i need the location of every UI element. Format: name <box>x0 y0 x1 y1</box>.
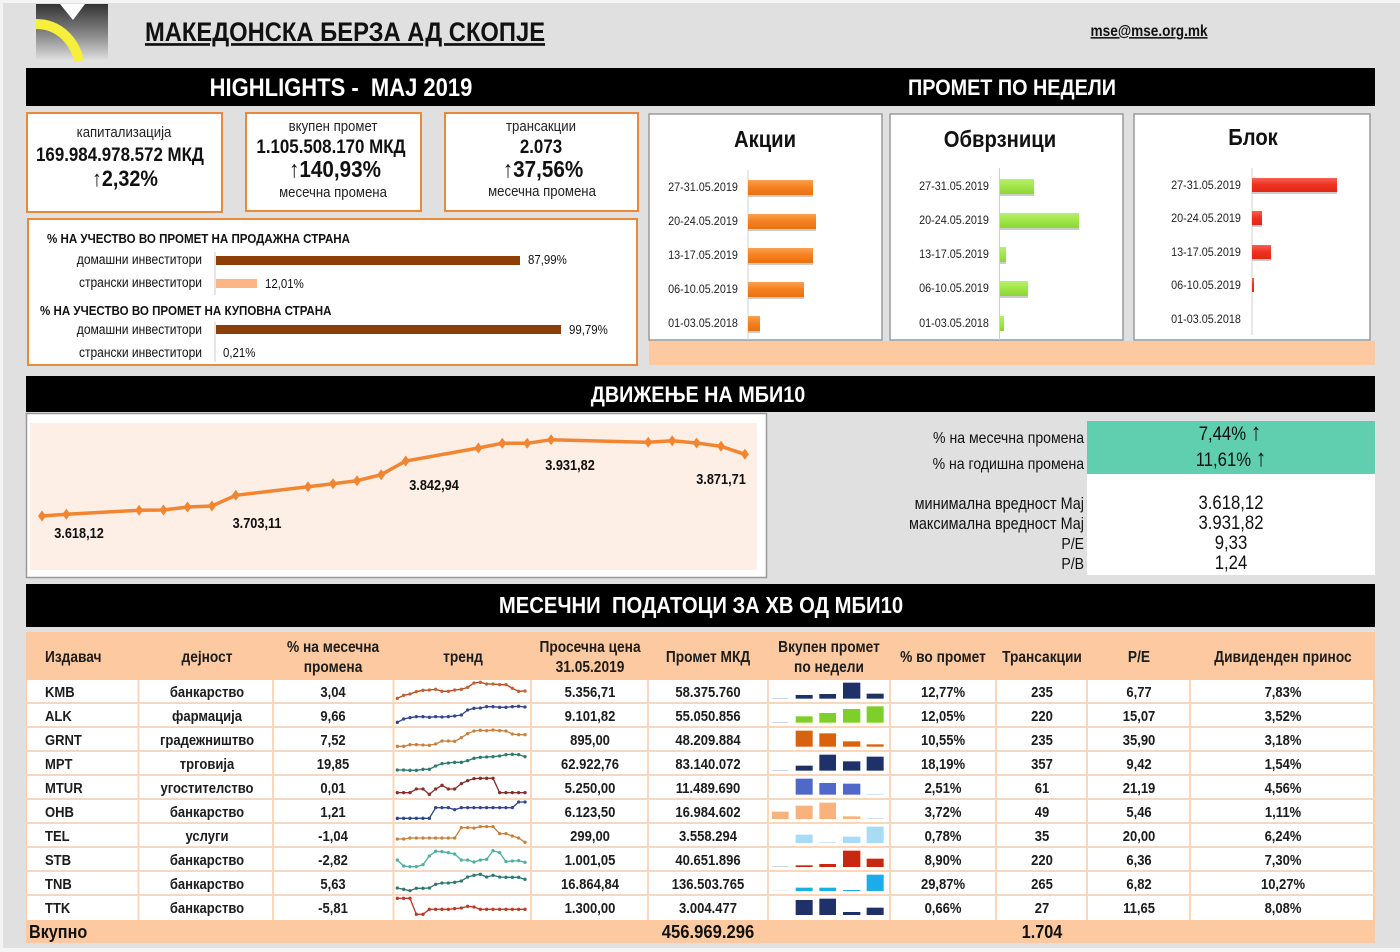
row ALK: фармација <box>172 707 242 724</box>
panel: MBI10 statistics: P/E <box>1061 535 1084 553</box>
row TTK: -5,81 <box>318 899 348 916</box>
row TNB: 6,82 <box>1126 875 1152 892</box>
row TNB: 136.503.765 <box>672 875 744 892</box>
row TNB: TNB <box>45 875 72 892</box>
chart: block trades: 01-03.05.2018 <box>1171 313 1241 326</box>
line chart: MBI10: 3.703,11 <box>233 515 282 531</box>
panel: MBI10 statistics: 11,61% ↑ <box>1196 445 1266 471</box>
row STB: банкарство <box>170 851 244 868</box>
line chart: MBI10 <box>26 414 766 578</box>
chart: shares: 06-10.05.2019 <box>668 283 738 296</box>
row OHB: 1,21 <box>320 803 346 820</box>
row OHB: 3,72% <box>925 803 962 820</box>
row MTUR: 61 <box>1035 779 1049 796</box>
row TEL: 20,00 <box>1123 827 1156 844</box>
row TTK: TTK <box>45 899 70 916</box>
row KMB: 58.375.760 <box>675 683 741 700</box>
row ALK: 9,66 <box>320 707 346 724</box>
panel: total turnover: ↑140,93% <box>289 156 381 182</box>
total row: 456.969.296 <box>662 921 754 942</box>
row STB <box>45 851 1302 868</box>
row STB: 6,36 <box>1126 851 1152 868</box>
row MPT: 62.922,76 <box>561 755 619 772</box>
panel: capitalisation <box>27 113 222 212</box>
chart: shares: Акции <box>734 126 796 152</box>
row KMB: банкарство <box>170 683 244 700</box>
panel: MBI10 statistics: 3.931,82 <box>1198 512 1264 533</box>
row TTK: 0,66% <box>925 899 962 916</box>
header bar: MBI10: ДВИЖЕЊЕ НА МБИ10 <box>591 383 805 407</box>
row GRNT: 48.209.884 <box>675 731 741 748</box>
panel: MBI10 statistics: 1,24 <box>1215 552 1247 573</box>
header bar: monthly data: МЕСЕЧНИ ПОДАТОЦИ ЗА ХВ ОД МБИ10 <box>499 592 903 618</box>
row MPT <box>45 755 1302 772</box>
row TNB: 265 <box>1031 875 1053 892</box>
chart: shares: 20-24.05.2019 <box>668 215 738 228</box>
panel: capitalisation: ↑2,32% <box>92 167 158 191</box>
row MPT: 83.140.072 <box>675 755 741 772</box>
chart: shares <box>649 114 882 340</box>
row MTUR: 2,51% <box>925 779 962 796</box>
row TNB: 16.864,84 <box>561 875 619 892</box>
panel: total turnover: месечна промена <box>279 183 387 200</box>
panel: investor participation: 0,21% <box>223 345 256 360</box>
row MPT: 357 <box>1031 755 1053 772</box>
row ALK: ALK <box>45 707 72 724</box>
row MTUR: MTUR <box>45 779 83 796</box>
table header row: % во промет <box>900 649 986 666</box>
row ALK: 3,52% <box>1265 707 1302 724</box>
row KMB: 7,83% <box>1265 683 1302 700</box>
row TNB: банкарство <box>170 875 244 892</box>
header bar: highlights and weekly turnover: ПРОМЕТ ПО НЕДЕЛИ <box>908 76 1116 100</box>
row GRNT: 3,18% <box>1265 731 1302 748</box>
panel: MBI10 statistics: минимална вредност Мај <box>915 495 1084 513</box>
panel: total turnover: 1.105.508.170 МКД <box>256 136 406 157</box>
row TTK <box>45 899 1302 916</box>
row GRNT: GRNT <box>45 731 82 748</box>
row OHB: OHB <box>45 803 74 820</box>
row TNB: 29,87% <box>921 875 966 892</box>
row KMB: KMB <box>45 683 75 700</box>
chart: bonds: Обврзници <box>944 126 1056 152</box>
row TNB: 10,27% <box>1261 875 1306 892</box>
row MTUR: 21,19 <box>1123 779 1156 796</box>
panel: MBI10 statistics: 9,33 <box>1215 532 1247 553</box>
table header row: Вкупен промет <box>778 639 880 656</box>
panel: investor participation <box>28 219 637 365</box>
row KMB: 6,77 <box>1126 683 1152 700</box>
row STB: 1.001,05 <box>565 851 616 868</box>
row TEL: 0,78% <box>925 827 962 844</box>
panel: investor participation: 87,99% <box>528 252 567 267</box>
row TTK: 1.300,00 <box>565 899 616 916</box>
row MPT: 19,85 <box>317 755 350 772</box>
peach strip under weekly charts <box>649 341 1375 365</box>
row TTK: 11,65 <box>1123 899 1155 916</box>
email: mse@mse.org.mk <box>1091 23 1208 40</box>
row KMB: 3,04 <box>320 683 346 700</box>
data table <box>26 632 1375 943</box>
panel: MBI10 statistics: % на месечна промена <box>933 429 1085 447</box>
panel: capitalisation: капитализација <box>77 123 172 140</box>
row STB: -2,82 <box>318 851 348 868</box>
row TEL: 299,00 <box>570 827 610 844</box>
row STB: 220 <box>1031 851 1053 868</box>
row KMB: 235 <box>1031 683 1053 700</box>
row TTK: 27 <box>1035 899 1049 916</box>
row OHB: 49 <box>1035 803 1049 820</box>
panel: transactions <box>445 113 638 211</box>
row GRNT: 235 <box>1031 731 1053 748</box>
panel: investor participation: домашни инвеститори <box>77 321 202 337</box>
row MPT: трговија <box>180 755 234 772</box>
chart: block trades <box>1134 114 1370 340</box>
row ALK: 220 <box>1031 707 1053 724</box>
chart: bonds: 06-10.05.2019 <box>919 282 989 295</box>
chart: block trades: 27-31.05.2019 <box>1171 179 1241 192</box>
row TEL: TEL <box>45 827 70 844</box>
row OHB: 5,46 <box>1126 803 1152 820</box>
row TTK: 8,08% <box>1265 899 1302 916</box>
header bar: MBI10 <box>26 376 1375 412</box>
table header row: по недели <box>794 659 864 676</box>
row MTUR: 0,01 <box>320 779 346 796</box>
panel: MBI10 statistics: максимална вредност Мај <box>909 515 1084 533</box>
line chart: MBI10: 3.842,94 <box>409 477 459 493</box>
row TTK: банкарство <box>170 899 244 916</box>
table header row: P/E <box>1128 649 1150 666</box>
row TEL: 35 <box>1035 827 1049 844</box>
panel: transactions: трансакции <box>506 117 576 134</box>
table header row: промена <box>304 659 363 676</box>
line chart: MBI10: 3.931,82 <box>545 457 595 473</box>
row OHB: 16.984.602 <box>675 803 741 820</box>
chart: shares: 27-31.05.2019 <box>668 181 738 194</box>
row OHB: 6.123,50 <box>565 803 616 820</box>
table header row: Издавач <box>45 649 102 666</box>
panel: investor participation: 12,01% <box>265 276 304 291</box>
row STB: STB <box>45 851 71 868</box>
row TEL: 3.558.294 <box>679 827 737 844</box>
row GRNT: градежништво <box>160 731 254 748</box>
heading: sell side: % НА УЧЕСТВО ВО ПРОМЕТ НА ПРОДАЖНА СТРАНА <box>47 231 350 246</box>
chart: shares: 13-17.05.2019 <box>668 249 738 262</box>
row ALK: 12,05% <box>921 707 966 724</box>
total row <box>29 921 1063 942</box>
table header row: Трансакции <box>1002 649 1082 666</box>
panel: investor participation: странски инвеститори <box>79 344 202 360</box>
logo <box>36 4 108 61</box>
line chart: MBI10: 3.618,12 <box>54 525 104 541</box>
bar: domestic buy <box>216 325 561 334</box>
panel: transactions: месечна промена <box>488 182 596 199</box>
row GRNT <box>45 731 1302 748</box>
chart: bonds: 13-17.05.2019 <box>919 248 989 261</box>
row OHB: банкарство <box>170 803 244 820</box>
row MTUR: 5.250,00 <box>565 779 616 796</box>
chart: bonds: 20-24.05.2019 <box>919 214 989 227</box>
panel: investor participation: 99,79% <box>569 322 608 337</box>
chart: bonds: 27-31.05.2019 <box>919 180 989 193</box>
row MTUR <box>45 779 1302 796</box>
row MTUR: 11.489.690 <box>676 779 740 796</box>
row ALK: 9.101,82 <box>565 707 616 724</box>
row ALK: 15,07 <box>1123 707 1156 724</box>
table header row: Промет МКД <box>666 649 751 666</box>
header bar: monthly data <box>26 584 1375 627</box>
panel: investor participation: домашни инвеститори <box>77 251 202 267</box>
row MPT: 9,42 <box>1126 755 1152 772</box>
row TEL <box>45 827 1302 844</box>
table header row: дејност <box>181 649 233 666</box>
row GRNT: 35,90 <box>1123 731 1156 748</box>
row MPT: 1,54% <box>1265 755 1302 772</box>
table header row: % на месечна <box>287 639 380 656</box>
panel: investor participation: странски инвеститори <box>79 274 202 290</box>
row MTUR: угостителство <box>160 779 254 796</box>
chart: block trades: 20-24.05.2019 <box>1171 212 1241 225</box>
total row: Вкупно <box>29 921 87 942</box>
panel: MBI10 statistics: 3.618,12 <box>1198 492 1264 513</box>
row KMB: 5.356,71 <box>565 683 616 700</box>
table header row <box>45 639 1352 676</box>
row OHB <box>45 803 1302 820</box>
chart: bonds <box>890 114 1123 340</box>
row STB: 8,90% <box>925 851 962 868</box>
total row: 1.704 <box>1022 921 1063 942</box>
heading: buy side: % НА УЧЕСТВО ВО ПРОМЕТ НА КУПОВНА СТРАНА <box>40 303 332 318</box>
table header row: Просечна цена <box>540 639 641 656</box>
header bar: highlights and weekly turnover <box>26 68 1375 106</box>
table header row: тренд <box>443 649 484 666</box>
row GRNT: 895,00 <box>570 731 610 748</box>
panel: MBI10 statistics: 7,44% ↑ <box>1199 419 1261 445</box>
row TEL: -1,04 <box>318 827 348 844</box>
panel: MBI10 statistics <box>909 419 1375 575</box>
row MPT: MPT <box>45 755 73 772</box>
row KMB <box>45 683 1302 700</box>
chart: block trades: Блок <box>1228 124 1278 150</box>
panel: MBI10 statistics: P/B <box>1061 555 1084 573</box>
line chart: MBI10: 3.871,71 <box>696 471 746 487</box>
row TTK: 3.004.477 <box>679 899 737 916</box>
row ALK <box>45 707 1302 724</box>
row GRNT: 10,55% <box>921 731 966 748</box>
row STB: 7,30% <box>1265 851 1302 868</box>
row ALK: 55.050.856 <box>675 707 741 724</box>
trend sparklines <box>397 682 525 914</box>
chart: shares: 01-03.05.2018 <box>668 317 738 330</box>
header bar: highlights and weekly turnover: HIGHLIGHTS - МАЈ 2019 <box>210 74 472 101</box>
row MTUR: 4,56% <box>1265 779 1302 796</box>
chart: block trades: 13-17.05.2019 <box>1171 246 1241 259</box>
chart: block trades: 06-10.05.2019 <box>1171 279 1241 292</box>
table header row: 31.05.2019 <box>556 659 624 676</box>
row KMB: 12,77% <box>921 683 966 700</box>
panel: MBI10 statistics: % на годишна промена <box>933 455 1085 473</box>
row GRNT: 7,52 <box>320 731 346 748</box>
row OHB: 1,11% <box>1265 803 1302 820</box>
panel: total turnover <box>246 113 421 211</box>
bar: domestic sell <box>216 256 520 265</box>
row TNB: 5,63 <box>320 875 346 892</box>
row MPT: 18,19% <box>921 755 966 772</box>
panel: capitalisation: 169.984.978.572 МКД <box>36 144 204 165</box>
row TNB <box>45 875 1306 892</box>
bar: foreign sell <box>216 279 257 288</box>
row STB: 40.651.896 <box>675 851 741 868</box>
weekly turnover mini bars <box>772 683 884 915</box>
panel: total turnover: вкупен промет <box>289 117 378 134</box>
table header row: Дивиденден принос <box>1214 649 1352 666</box>
title: МАКЕДОНСКА БЕРЗА АД СКОПЈЕ <box>145 18 545 47</box>
panel: transactions: ↑37,56% <box>503 156 584 182</box>
panel: transactions: 2.073 <box>520 136 562 157</box>
row TEL: 6,24% <box>1265 827 1302 844</box>
row TEL: услуги <box>186 827 228 844</box>
chart: bonds: 01-03.05.2018 <box>919 317 989 330</box>
